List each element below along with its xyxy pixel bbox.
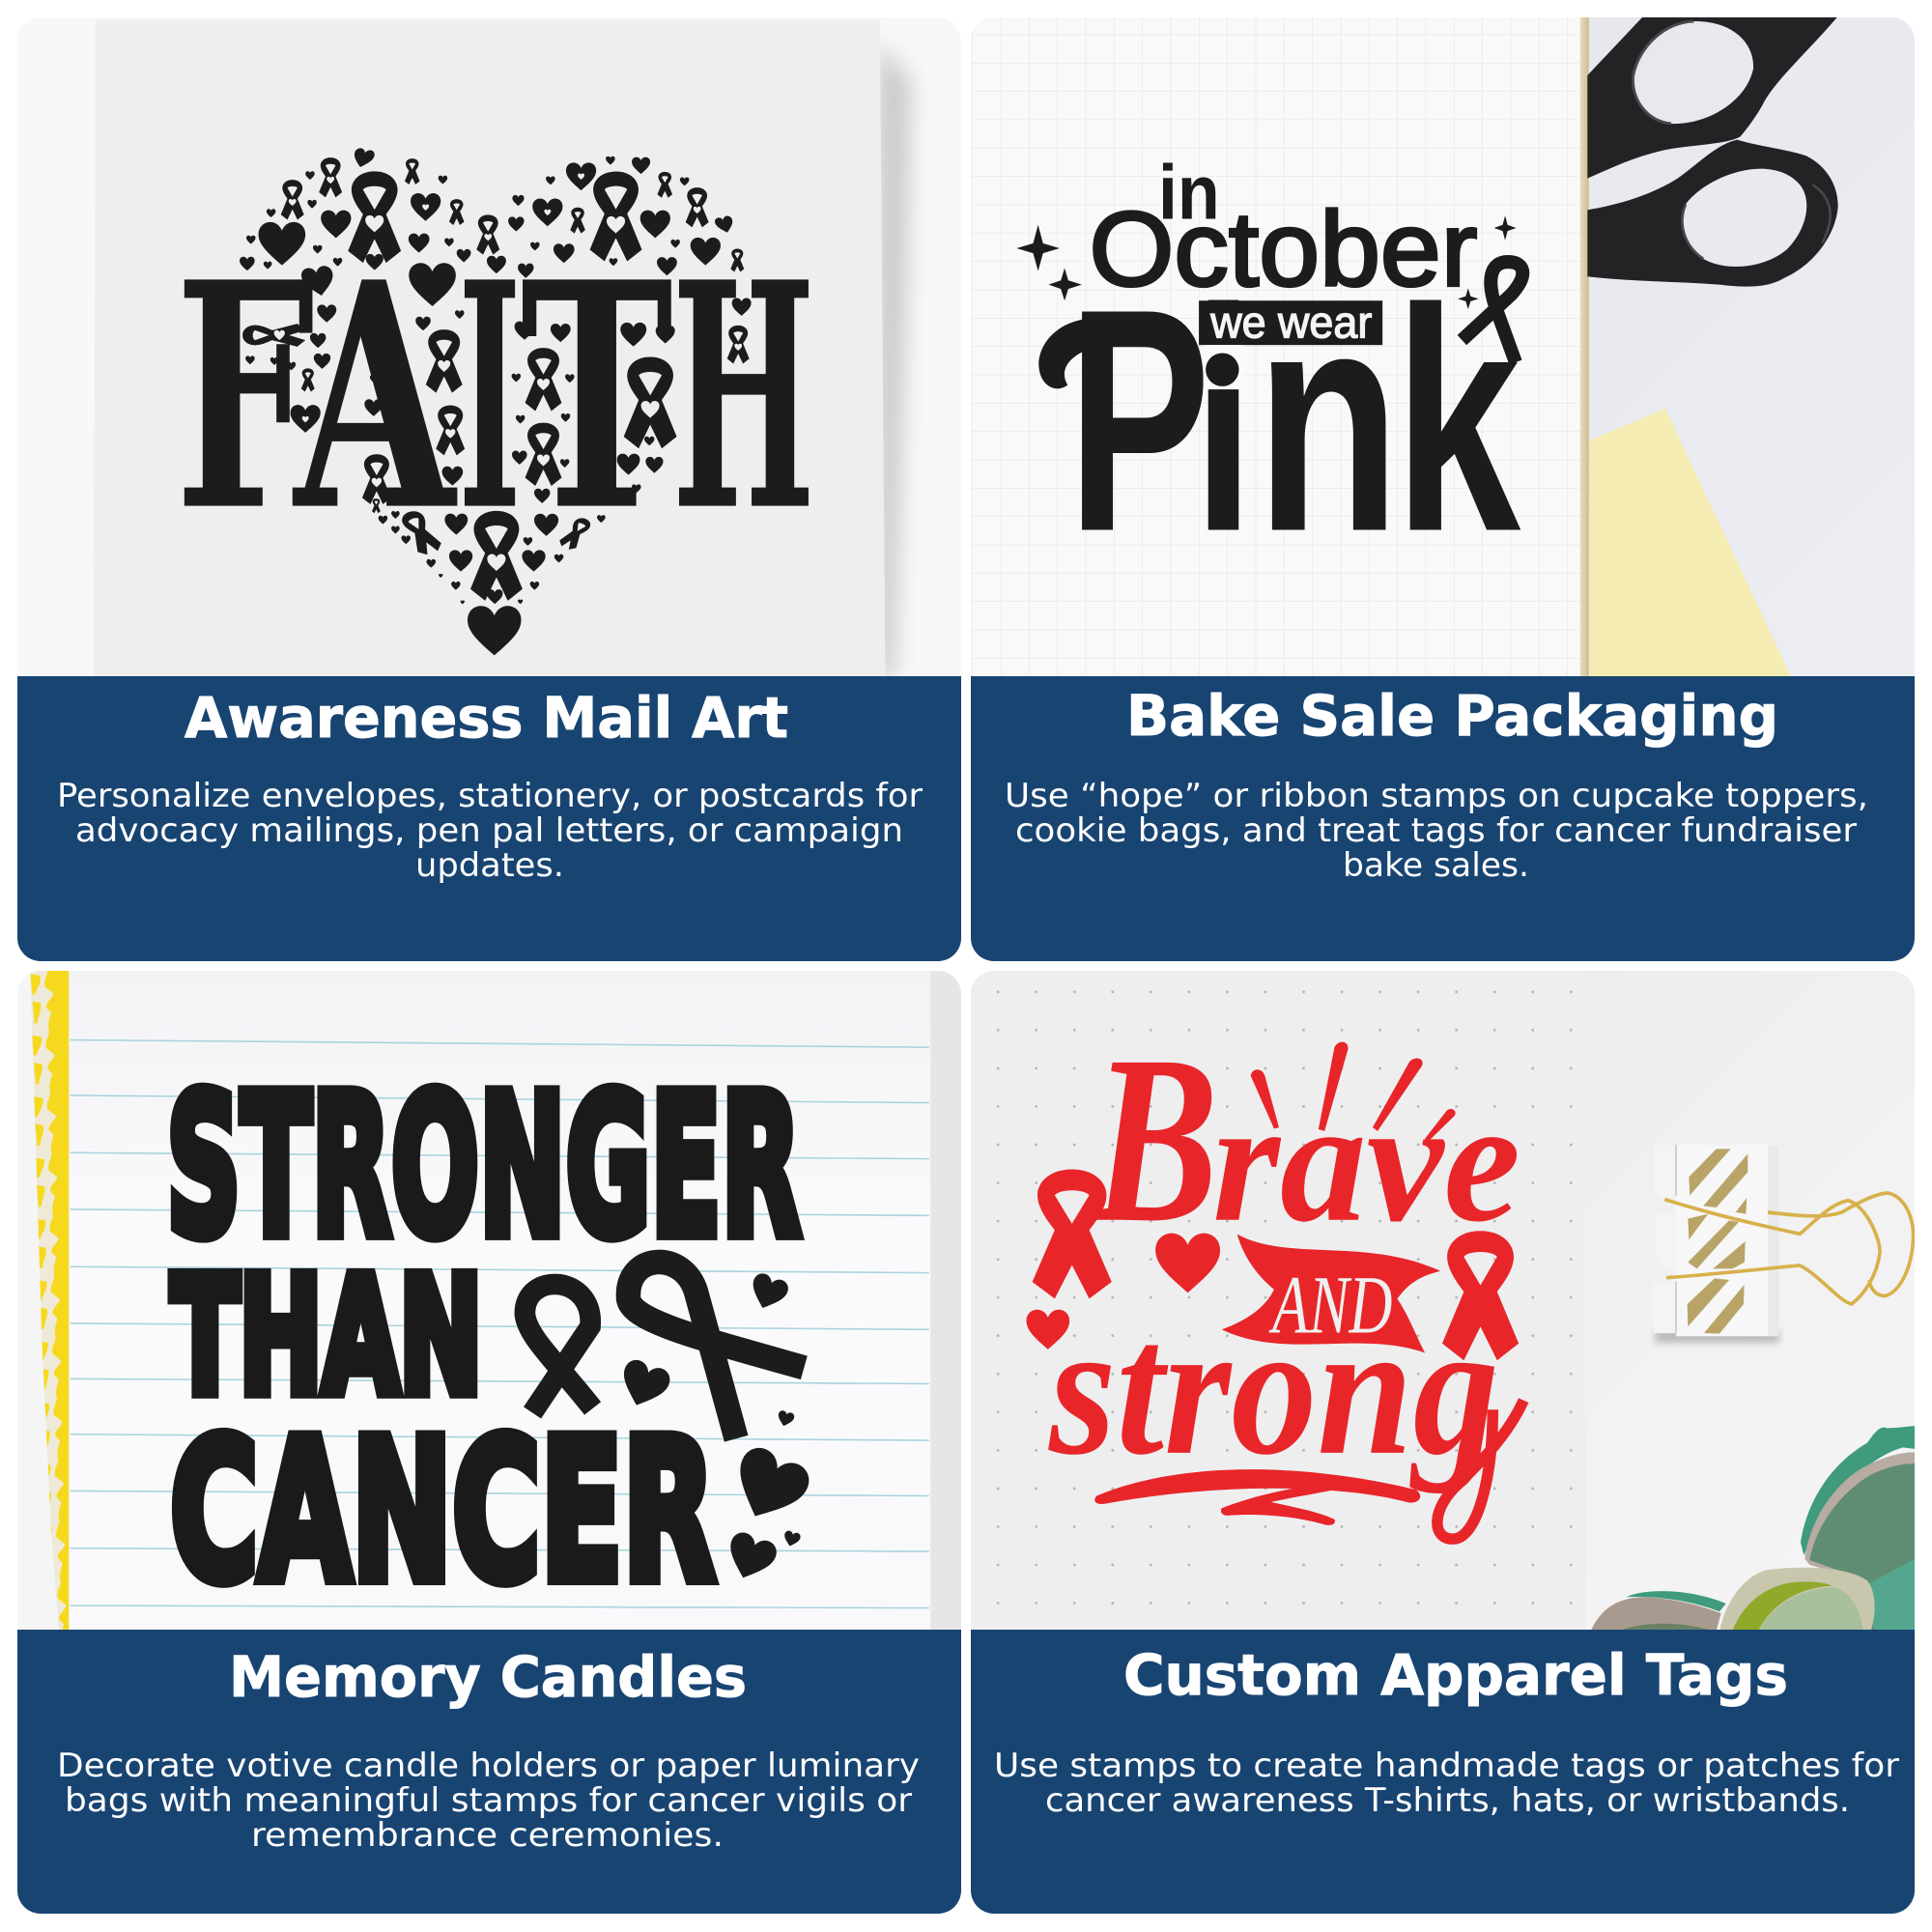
icon: scissors xyxy=(1587,17,1838,287)
caption background xyxy=(971,1630,1915,1914)
panel: Awareness Mail Art xyxy=(17,17,961,961)
description xyxy=(1008,781,1864,877)
sun rays xyxy=(1251,1042,1456,1142)
description: cancer awareness T-shirts, hats, or wristbands. xyxy=(1045,1781,1850,1820)
stamp: in October we wear Pink: October xyxy=(1090,190,1477,308)
P curl xyxy=(1038,319,1082,388)
stamp: FAITH heart: F xyxy=(175,215,315,580)
heading: Custom Apparel Tags xyxy=(1123,1642,1788,1708)
stamp: in October we wear Pink: in xyxy=(1158,149,1220,235)
stamp: in October we wear Pink: i xyxy=(1193,243,1254,598)
caption background xyxy=(971,676,1915,961)
banner with AND: AND xyxy=(1268,1258,1392,1350)
description: bags with meaningful stamps for cancer vigils or xyxy=(65,1781,912,1820)
description: cookie bags, and treat tags for cancer fundraiser xyxy=(1015,811,1857,850)
description: bake sales. xyxy=(1343,846,1529,885)
panel: Awareness Mail Art: H xyxy=(672,215,815,580)
caption background xyxy=(17,676,961,961)
stamp: Brave and Strong: B xyxy=(1090,1006,1218,1272)
description xyxy=(57,1747,920,1855)
stamp: Stronger Than Cancer xyxy=(167,1082,810,1588)
stamp: FAITH heart: I xyxy=(458,215,522,580)
description: updates. xyxy=(415,846,564,885)
banner with AND xyxy=(1222,1234,1440,1353)
description: remembrance ceremonies. xyxy=(251,1816,724,1855)
stamp: in October we wear Pink: k xyxy=(1394,243,1522,598)
photo: paper sheet xyxy=(94,19,911,676)
caption background xyxy=(17,1630,961,1914)
description: Personalize envelopes, stationery, or postcards for xyxy=(57,777,923,815)
photo: grid notebook xyxy=(966,13,1792,678)
stamp: FAITH heart: T xyxy=(521,215,673,580)
stamp: Stronger Than Cancer: STRONGER xyxy=(166,1055,801,1280)
stamp: Stronger Than Cancer: CANCER xyxy=(170,1400,715,1625)
icon: small ribbon xyxy=(525,1284,593,1412)
panel: Custom Apparel Tags xyxy=(966,966,1916,1914)
stamp: Stronger Than Cancer: THAN xyxy=(171,1244,482,1431)
description xyxy=(994,1747,1899,1820)
description xyxy=(57,777,923,885)
panel: Bake Sale Packaging xyxy=(966,13,1915,961)
icon: binder clip xyxy=(1653,1145,1914,1343)
stamp: in October we wear Pink xyxy=(1016,162,1530,529)
heading: Awareness Mail Art xyxy=(185,685,788,751)
heading: Bake Sale Packaging xyxy=(1126,683,1778,749)
description: advocacy mailings, pen pal letters, or campaign xyxy=(75,811,903,850)
stamp: Brave and Strong: strong xyxy=(1047,1283,1499,1494)
photo: lined paper xyxy=(69,966,961,1632)
photo: dot-grid notebook xyxy=(966,966,1585,1632)
stamp: FAITH heart xyxy=(175,147,815,655)
icon: sticky note xyxy=(1589,409,1792,678)
description: Decorate votive candle holders or paper luminary xyxy=(57,1747,920,1785)
stamp: Brave and Strong xyxy=(1027,1006,1523,1539)
washi tape xyxy=(30,971,69,1631)
stamp: FAITH heart: A xyxy=(291,215,459,580)
icon: large tilted ribbon xyxy=(628,1262,804,1438)
we wear box: we wear xyxy=(1209,298,1372,348)
heading: Memory Candles xyxy=(229,1644,747,1710)
icon: ribbon xyxy=(1462,262,1522,362)
description: Use stamps to create handmade tags or patches for xyxy=(994,1747,1899,1785)
icon: succulent xyxy=(1591,1426,1916,1631)
stamp: in October we wear Pink: P xyxy=(1067,243,1210,598)
stamp: Brave and Strong: rave xyxy=(1212,1065,1520,1259)
stamp: in October we wear Pink: n xyxy=(1256,243,1401,598)
underline swash xyxy=(1094,1469,1420,1525)
icons: red ribbons xyxy=(1033,1169,1519,1360)
description: Use “hope” or ribbon stamps on cupcake toppers, xyxy=(1005,777,1868,815)
panel: Memory Candles xyxy=(17,966,961,1914)
